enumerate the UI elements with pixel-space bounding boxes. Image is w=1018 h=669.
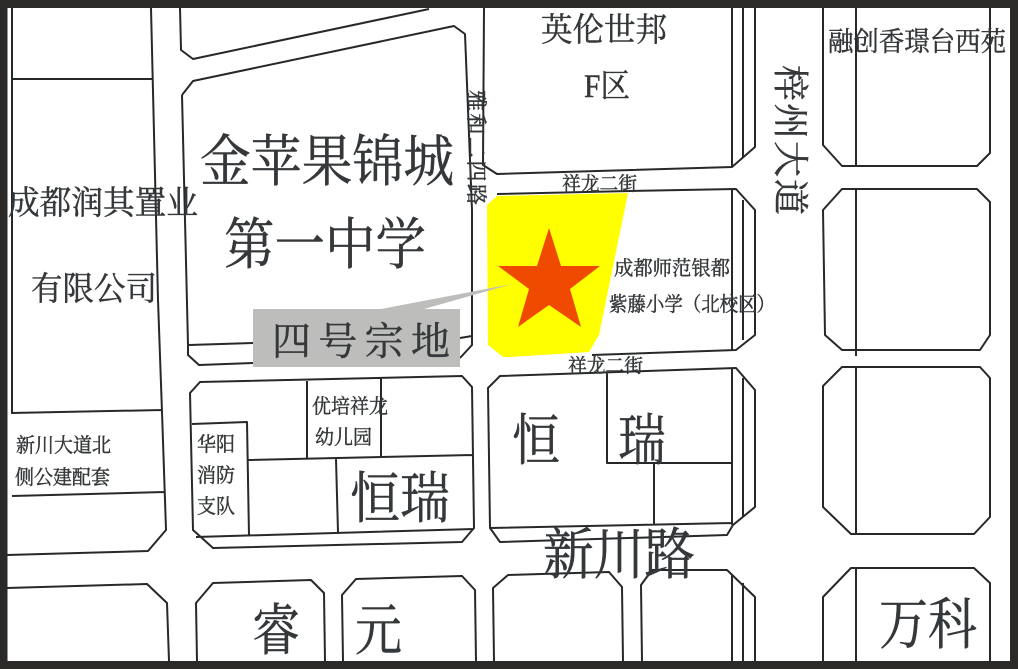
label: 华阳消防支队: 支队 — [197, 495, 235, 518]
label: 恒瑞 left: 恒瑞 — [350, 469, 450, 531]
label: 华阳消防支队: 华阳 — [197, 433, 235, 456]
label: 睿: 睿 — [252, 601, 300, 663]
icon: red star marker — [498, 228, 600, 327]
road label: 梓州大道: 梓州大道 — [770, 65, 810, 215]
parcel: 恒瑞 right block — [488, 368, 755, 542]
label: 成都润其置业: 成都润其置业 — [8, 185, 198, 222]
label: 华阳消防支队 — [197, 433, 235, 518]
parcels: right column — [823, 8, 990, 661]
label: 新川大道北侧公建配套 — [15, 434, 111, 489]
label: 华阳消防支队: 消防 — [197, 464, 235, 487]
road label: 新川路: 新川路 — [543, 525, 695, 587]
label: 幼儿园: 幼儿园 — [315, 426, 372, 449]
label: 优培祥龙: 优培祥龙 — [312, 395, 388, 418]
road label: 祥龙二街 south: 祥龙二街 — [568, 355, 643, 377]
subject site: yellow parcel — [487, 193, 628, 357]
label: 新川大道北侧公建配套: 新川大道北 — [16, 434, 111, 457]
label: 有限公司: 有限公司 — [31, 271, 157, 308]
road label: 雅和二四路: 雅和二四路 — [464, 90, 488, 205]
parcel: 金苹果锦城第一中学 block — [180, 8, 472, 365]
label: 恒瑞 right: 恒 — [512, 411, 560, 473]
label: F区: F区 — [584, 69, 630, 105]
label: 新川大道北侧公建配套: 侧公建配套 — [15, 466, 110, 489]
callout: 四号宗地 label with leader — [253, 284, 512, 367]
callout: 四号宗地 label with leader: 四号宗地 — [272, 321, 450, 364]
parcel: 成都师范银都紫藤小学 block — [497, 189, 755, 355]
parcels: bottom row — [196, 570, 755, 661]
label: 金苹果锦城: 金苹果锦城 — [200, 132, 454, 194]
label: 恒瑞 right: 瑞 — [618, 411, 666, 473]
label: 英伦世邦: 英伦世邦 — [541, 12, 667, 49]
label: 万科: 万科 — [879, 595, 977, 657]
label: 成都师范银都: 成都师范银都 — [614, 257, 730, 280]
label: 第一中学: 第一中学 — [224, 215, 426, 277]
label: 恒瑞 right — [512, 411, 666, 473]
road label: 祥龙二街 north: 祥龙二街 — [562, 173, 637, 195]
parcel: 恒瑞 left block — [190, 376, 474, 548]
label: 元: 元 — [355, 601, 402, 663]
parcel: 英伦世邦F区 block — [483, 8, 755, 174]
label: 紫藤小学（北校区）: 紫藤小学（北校区） — [609, 293, 775, 316]
label: 融创香璟台西苑: 融创香璟台西苑 — [828, 27, 1006, 57]
road and parcel lines: left column — [7, 8, 169, 661]
